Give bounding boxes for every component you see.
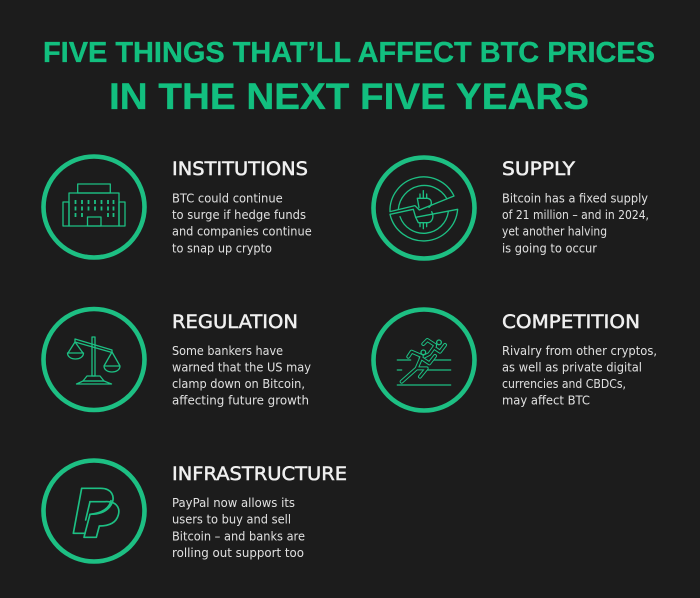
text: regulation: Some bankers have [172,344,283,358]
icon: split bitcoin coin [374,158,474,258]
text: competition: currencies and CBDCs, [502,377,626,391]
text: institutions: and companies continue [172,224,312,238]
title: FIVE THINGS THAT’LL AFFECT BTC PRICES [43,37,655,69]
title: IN THE NEXT FIVE YEARS [109,75,589,117]
text: regulation: clamp down on Bitcoin, [172,377,305,391]
text: supply [502,192,649,256]
heading: regulation: REGULATION [172,311,298,333]
text: competition [502,344,657,408]
panel: competition [374,310,657,410]
text: infrastructure: Bitcoin – and banks are [172,530,305,544]
heading: competition: COMPETITION [502,311,640,333]
panel: institutions [44,156,312,258]
icon: scales [44,309,144,410]
text: competition: as well as private digital [502,360,642,374]
text: infrastructure [172,496,305,560]
text: infrastructure: users to buy and sell [172,512,291,526]
title [43,37,655,117]
text: institutions [172,192,312,256]
text: competition: Rivalry from other cryptos, [502,344,657,358]
heading: supply: SUPPLY [502,158,575,180]
text: supply: is going to occur [502,242,597,256]
icon: PayPal logo [44,460,144,562]
text: infrastructure: rolling out support too [172,546,304,560]
text: supply: of 21 million – and in 2024, [502,208,649,222]
icon: building [44,156,144,258]
heading: institutions: INSTITUTIONS [172,158,308,180]
text: supply: yet another halving [502,224,607,238]
text: competition: may affect BTC [502,394,590,408]
text: supply: Bitcoin has a fixed supply [502,192,648,206]
text: regulation: warned that the US may [172,360,311,374]
text: infrastructure: PayPal now allows its [172,496,295,510]
text: institutions: to snap up crypto [172,242,272,256]
text: regulation: affecting future growth [172,394,309,408]
panel: supply [374,158,649,258]
text: institutions: BTC could continue [172,192,283,206]
panel: infrastructure [44,460,347,562]
text: institutions: to surge if hedge funds [172,208,306,222]
panel: regulation [44,309,311,410]
heading: infrastructure: INFRASTRUCTURE [172,463,347,485]
text: regulation [172,344,311,408]
icon: runners [374,310,474,410]
